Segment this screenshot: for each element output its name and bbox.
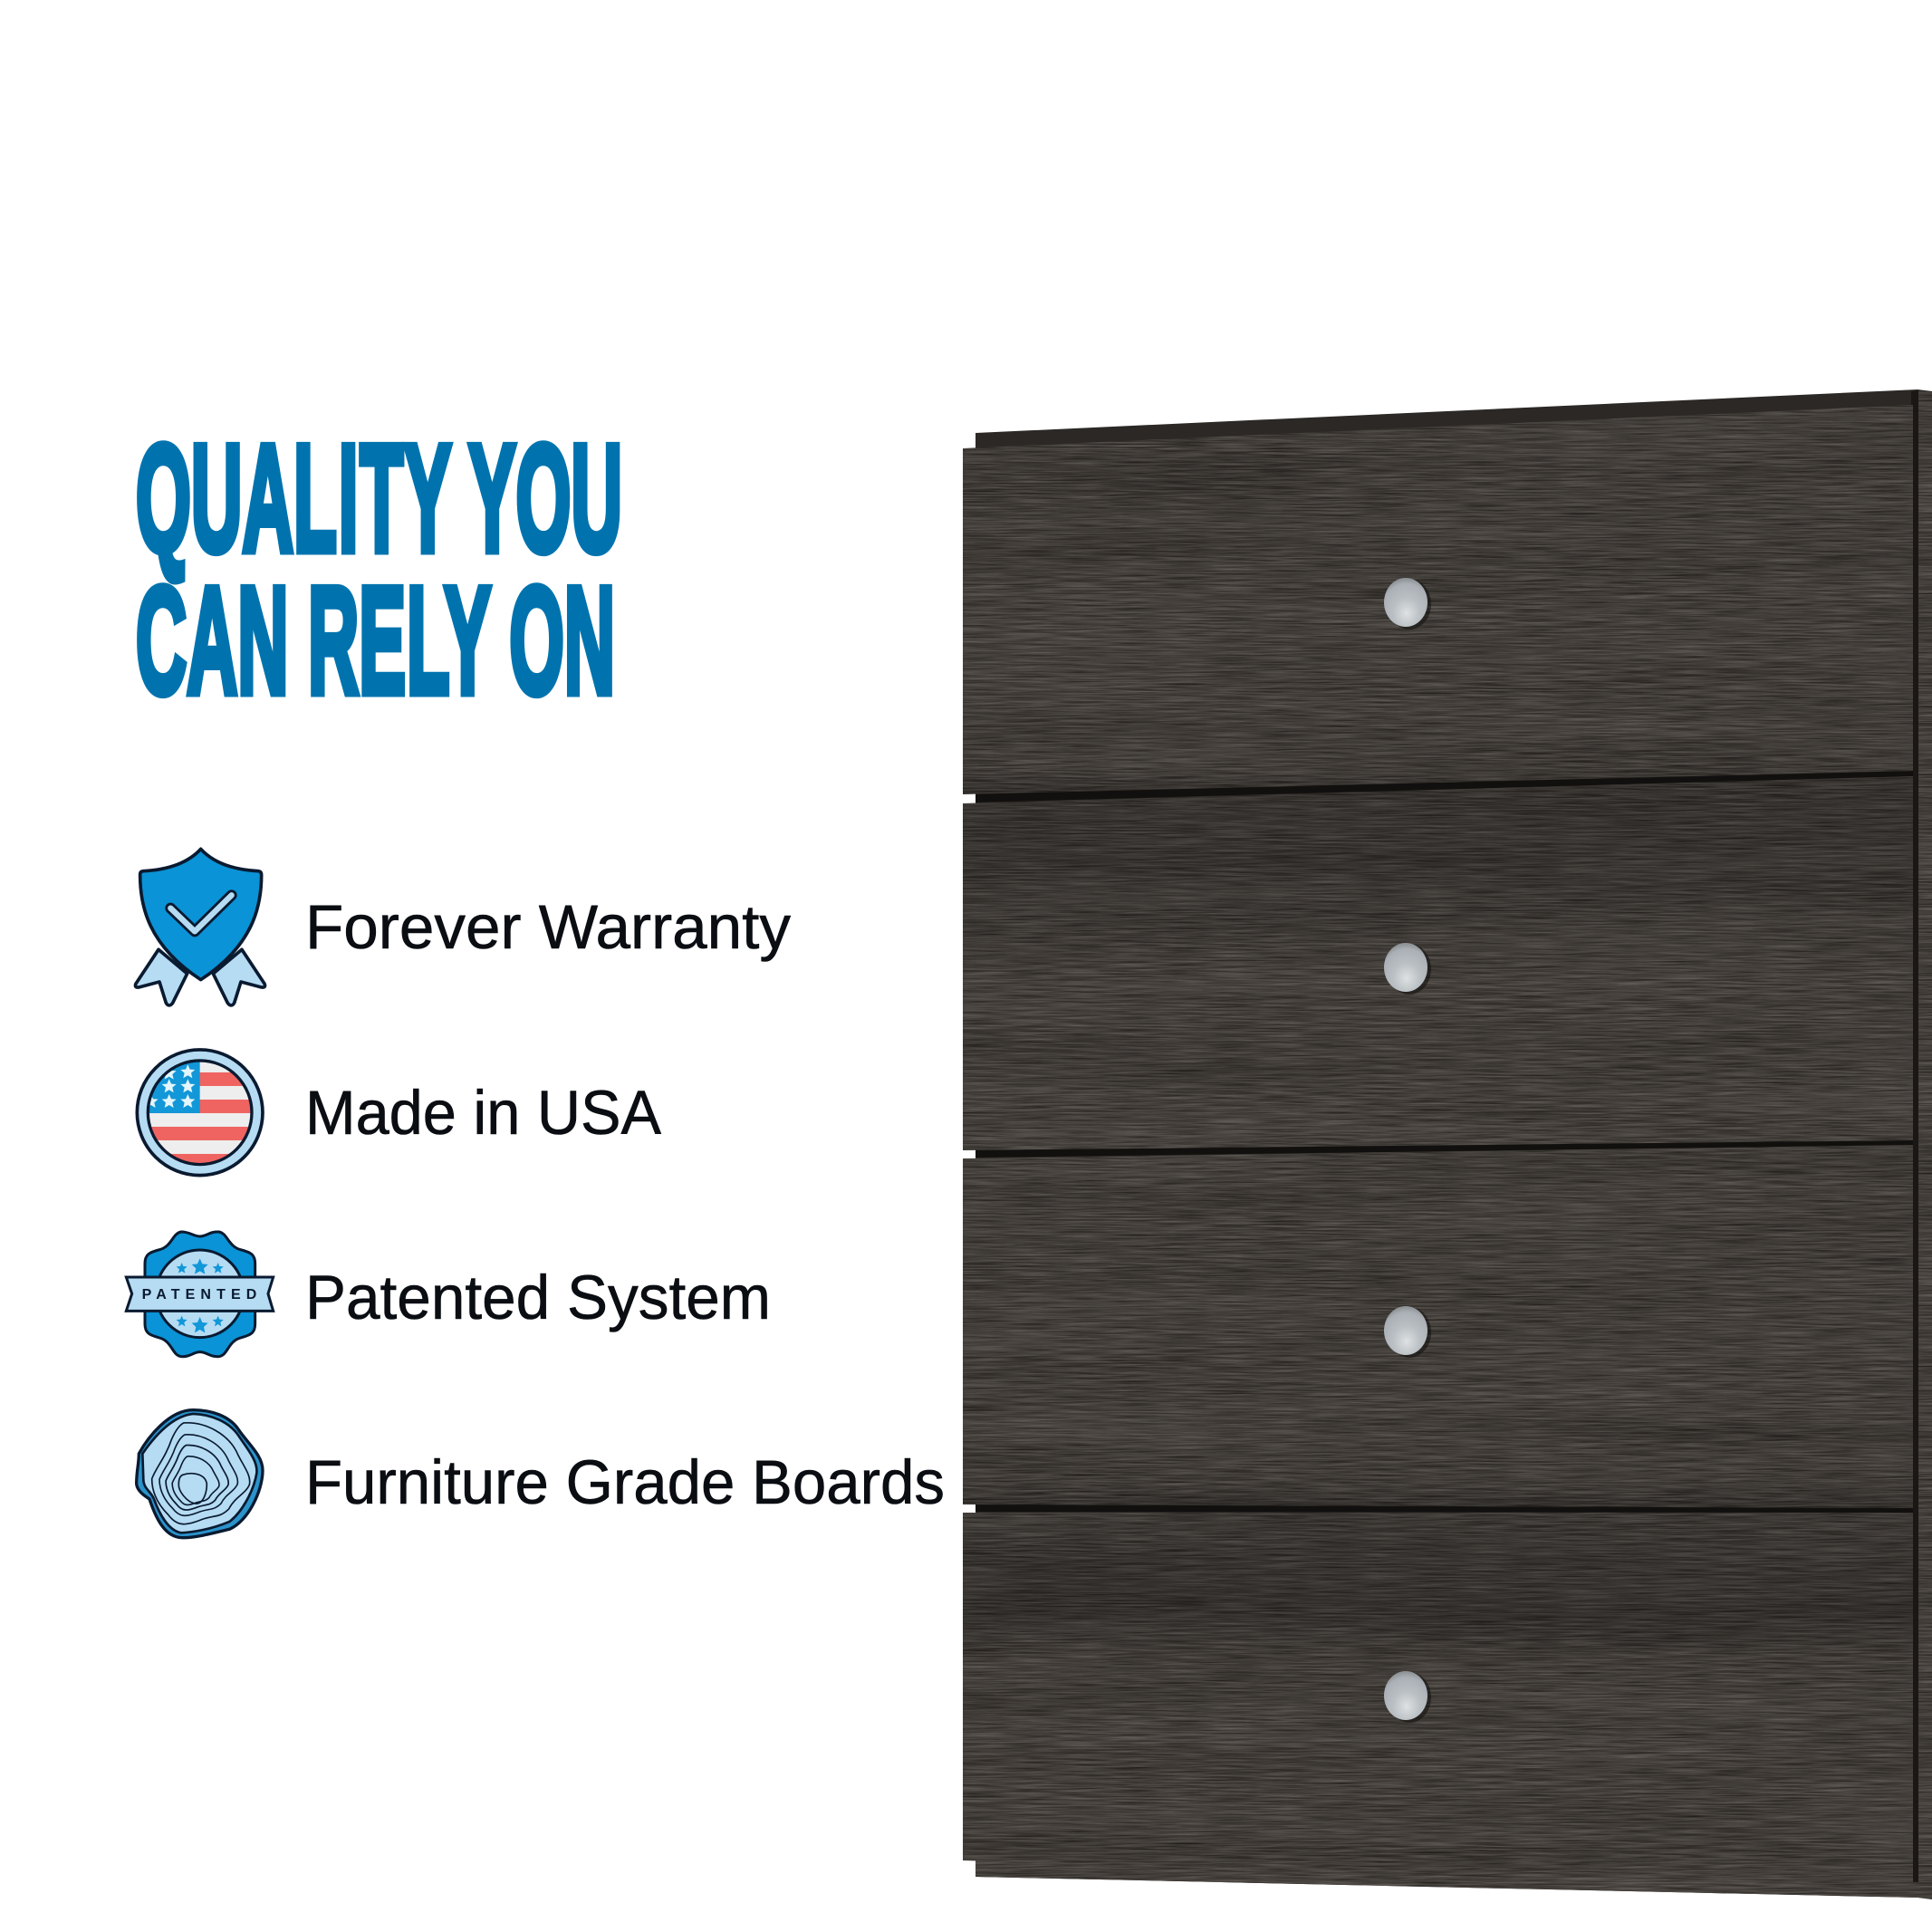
cabinet side strip	[1918, 391, 1932, 1899]
divider shadow 3	[976, 1503, 1913, 1513]
drawer 3	[963, 1145, 1913, 1508]
label: furniture grade boards: Furniture Grade Boards	[305, 1447, 945, 1517]
drawer 1	[963, 405, 1913, 794]
label: patented system: Patented System	[305, 1263, 771, 1332]
label: forever warranty: Forever Warranty	[305, 892, 791, 962]
title: QUALITY YOU	[136, 413, 622, 583]
panel: dresser product	[963, 389, 1932, 1899]
cabinet bottom rail	[976, 1848, 1918, 1898]
label: made in usa: Made in USA	[305, 1078, 661, 1148]
drawer 4	[963, 1513, 1913, 1891]
icon: usa flag badge	[137, 1050, 263, 1176]
icon: warranty shield with ribbons	[135, 849, 265, 1005]
icon: patented seal: PATENTED	[142, 1287, 256, 1302]
right gap shadow	[1911, 390, 1918, 1893]
divider shadow 2	[976, 1140, 1913, 1158]
icon: tree rings	[137, 1410, 263, 1538]
icon: patented seal	[126, 1232, 274, 1357]
drawer 2	[963, 776, 1913, 1150]
cabinet frame	[976, 389, 1932, 1899]
knob 4	[1384, 1671, 1431, 1723]
divider shadow 1	[976, 771, 1913, 803]
title: CAN RELY ON	[136, 555, 615, 726]
knob 2	[1384, 943, 1431, 995]
title	[136, 413, 622, 726]
knob 3	[1384, 1306, 1431, 1358]
knob 1	[1384, 578, 1431, 630]
